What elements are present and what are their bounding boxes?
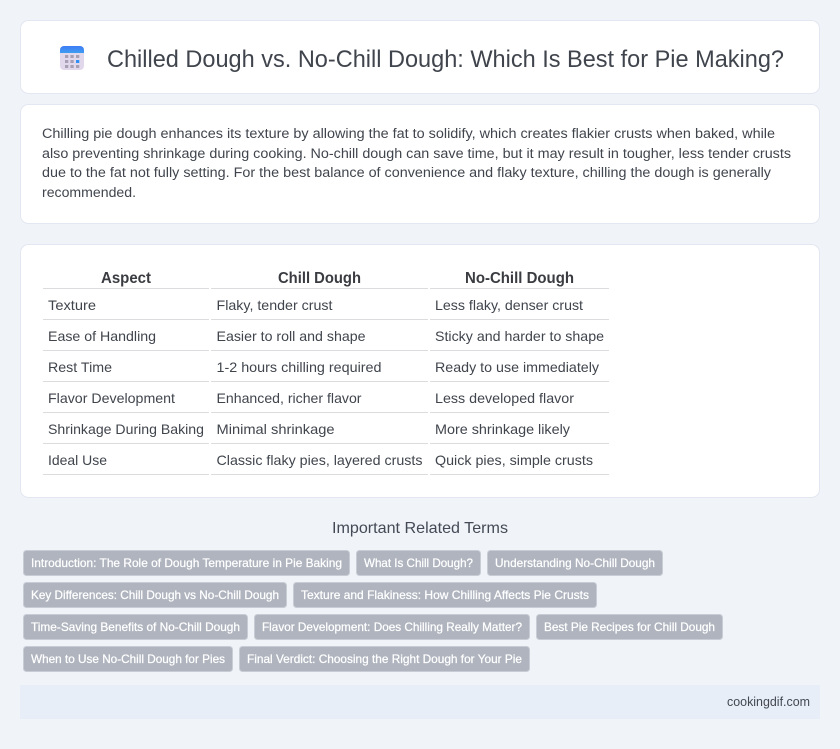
panel: introduction — [20, 104, 820, 224]
table header: No-Chill Dough — [465, 270, 574, 287]
table row: shrinkage during baking: Minimal shrinkage — [216, 421, 335, 437]
icon: calendar — [60, 46, 84, 70]
tag: introduction: Introduction: The Role of Dough Temperature in Pie Baking — [31, 556, 342, 570]
table row: flavor development: Flavor Development — [48, 390, 175, 406]
table row: texture: Less flaky, denser crust — [435, 297, 583, 313]
tag: texture and flakiness — [294, 582, 596, 608]
table row: ease of handling — [48, 328, 604, 344]
table row: ease of handling: Sticky and harder to shape — [435, 328, 604, 344]
text block: introduction paragraph — [42, 126, 791, 201]
text block: introduction paragraph: also preventing shrinkage during cooking. No-chill dough can save time, but it may result in tougher, less tender crusts — [42, 146, 791, 162]
tag: when to use no-chill dough: When to Use No-Chill Dough for Pies — [31, 652, 225, 666]
tag: understanding no-chill dough — [488, 550, 662, 576]
table row: texture: Flaky, tender crust — [216, 297, 333, 313]
tag: final verdict: Final Verdict: Choosing the Right Dough for Your Pie — [247, 652, 522, 666]
table row: texture: Texture — [48, 297, 96, 313]
title: Chilled Dough vs. No-Chill Dough: Which Is Best for Pie Making? — [107, 46, 784, 73]
heading: important related terms: Important Related Terms — [332, 520, 508, 537]
tag: key differences — [24, 582, 286, 608]
tag: final verdict — [240, 646, 530, 672]
table header: Chill Dough — [278, 270, 361, 287]
table row: ideal use — [48, 452, 593, 468]
text block: introduction paragraph: recommended. — [42, 185, 136, 201]
tag: understanding no-chill dough: Understanding No-Chill Dough — [495, 556, 655, 570]
table row: ideal use: Ideal Use — [48, 452, 107, 468]
tag: time-saving benefits: Time-Saving Benefits of No-Chill Dough — [31, 620, 240, 634]
table row: shrinkage during baking: Shrinkage During Baking — [48, 421, 204, 437]
tag: flavor development — [254, 614, 530, 640]
table row: rest time: Ready to use immediately — [435, 359, 599, 375]
footer bar — [20, 685, 820, 719]
text block: introduction paragraph: due to the fat not fully setting. For the best balance of convenience and flaky texture, chilling the dough is generally — [42, 165, 772, 181]
tag: introduction — [24, 550, 350, 576]
table header — [101, 270, 574, 287]
table header: Aspect — [101, 270, 151, 287]
related term tags — [24, 550, 722, 672]
tag: time-saving benefits — [24, 614, 248, 640]
panel: comparison table — [20, 244, 820, 498]
panel: title header — [20, 20, 820, 94]
footer source text: cookingdif.com — [727, 695, 810, 709]
table row: ideal use: Classic flaky pies, layered crusts — [216, 452, 422, 468]
tag: best pie recipes: Best Pie Recipes for Chill Dough — [544, 620, 715, 634]
table row: shrinkage during baking: More shrinkage likely — [435, 421, 570, 437]
table row: texture — [48, 297, 583, 313]
table row: ease of handling: Easier to roll and shape — [216, 328, 366, 344]
tag: what is chill dough: What Is Chill Dough? — [364, 556, 473, 570]
table row: rest time: 1-2 hours chilling required — [216, 359, 382, 375]
table row: shrinkage during baking — [48, 421, 570, 437]
text block: introduction paragraph: Chilling pie dough enhances its texture by allowing the fat to solidify, which creates flakier crusts when baked, while — [42, 126, 775, 142]
table row: ease of handling: Ease of Handling — [48, 328, 156, 344]
tag: texture and flakiness: Texture and Flakiness: How Chilling Affects Pie Crusts — [301, 588, 589, 602]
tag: flavor development: Flavor Development: Does Chilling Really Matter? — [262, 620, 522, 634]
table row: flavor development: Enhanced, richer flavor — [216, 390, 362, 406]
tag: when to use no-chill dough — [24, 646, 232, 672]
table row: rest time — [48, 359, 599, 375]
tag: best pie recipes — [536, 614, 722, 640]
tag: key differences: Key Differences: Chill Dough vs No-Chill Dough — [31, 588, 279, 602]
table row: flavor development — [48, 390, 574, 406]
table row: rest time: Rest Time — [48, 359, 112, 375]
table row: ideal use: Quick pies, simple crusts — [435, 452, 593, 468]
tag: what is chill dough — [356, 550, 480, 576]
table row: flavor development: Less developed flavor — [435, 390, 574, 406]
